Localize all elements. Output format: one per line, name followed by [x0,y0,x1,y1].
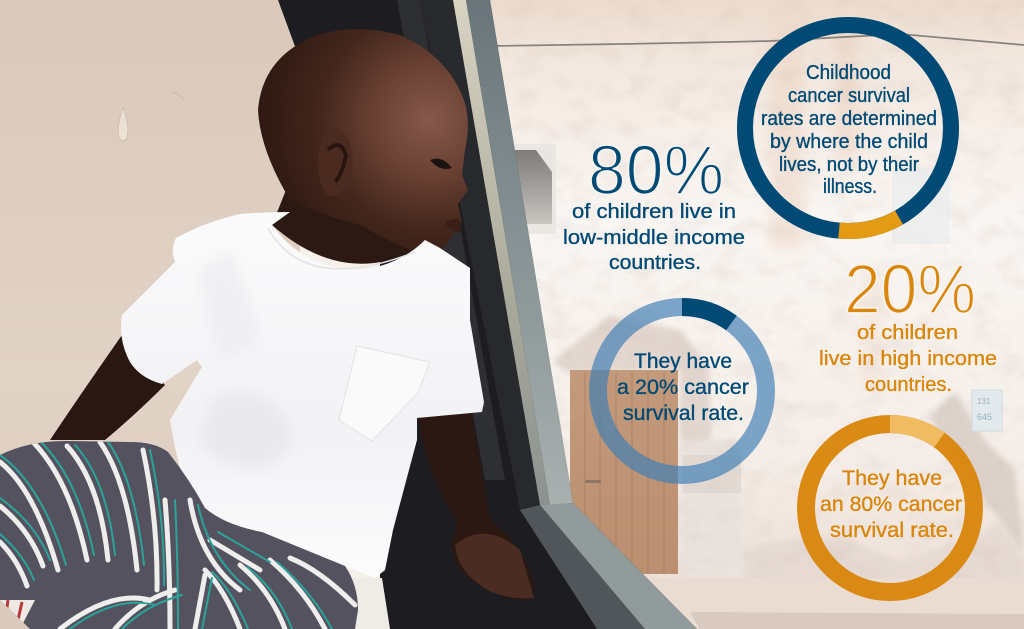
ring text: by where the child [770,131,928,153]
background: faded street scene through window [470,0,1024,629]
ring: 20% survival rate [598,307,766,475]
window sill ledge [345,578,390,629]
ring text: They have [634,350,732,373]
wooden door [570,370,678,574]
ring segment: light share [890,424,939,440]
big number 80%: 80% [588,131,724,209]
ring text [761,62,937,198]
pavement [640,578,1024,629]
ring text: an 80% cancer [820,493,962,516]
caption [819,322,997,396]
ring text: They have [842,467,942,490]
background: faded street scene through window: 645 [977,412,992,422]
eye [430,159,452,169]
statistic: 20% high income [819,250,997,396]
background: faded street scene through window: 131 [977,397,991,406]
ring text: lives, not by their [779,154,919,176]
statistic: 80% low-middle income [563,131,745,274]
boy figure [0,29,535,629]
shirt pocket [339,346,430,441]
ring text: survival rate. [830,519,954,542]
ear [318,130,353,196]
rear arm [50,335,165,440]
big number 20%: 20% [844,250,976,328]
caption: of children live in [572,201,736,223]
ring text: illness. [823,176,877,198]
neck [272,180,440,264]
caption: of children [857,322,958,344]
ring text: survival rate. [623,402,744,425]
shirt [121,212,484,578]
caption [563,201,745,274]
front arm and hand [418,405,535,600]
shirt collar [268,228,415,269]
ring segment: orange share [839,218,899,231]
striped pants [0,430,370,629]
ring: 80% survival rate [806,424,974,592]
mouth [445,219,461,232]
ring text: cancer survival [788,85,910,107]
ring text: rates are determined [761,108,937,130]
small side window [510,144,556,234]
wall mottling texture [521,41,1024,537]
ring text [820,467,962,542]
window frame [278,0,697,629]
background: interior wall [0,0,300,629]
shirt shadows [200,250,291,470]
overhead wire [490,34,1024,46]
caption: low-middle income [563,227,745,249]
ring text: a 20% cancer [617,376,749,399]
ring: survival determined by location [745,25,951,231]
ring segment: dark share [682,307,731,323]
plaster damage patches [552,315,1024,582]
pale blue shutter [892,168,950,244]
caption: countries. [609,252,701,274]
caption: countries. [865,374,952,396]
address plaques [683,455,741,493]
ring text: Childhood [806,62,891,84]
head [258,29,468,255]
ring text [617,350,749,425]
caption: live in high income [819,348,997,370]
peach plaster stains [767,24,882,386]
